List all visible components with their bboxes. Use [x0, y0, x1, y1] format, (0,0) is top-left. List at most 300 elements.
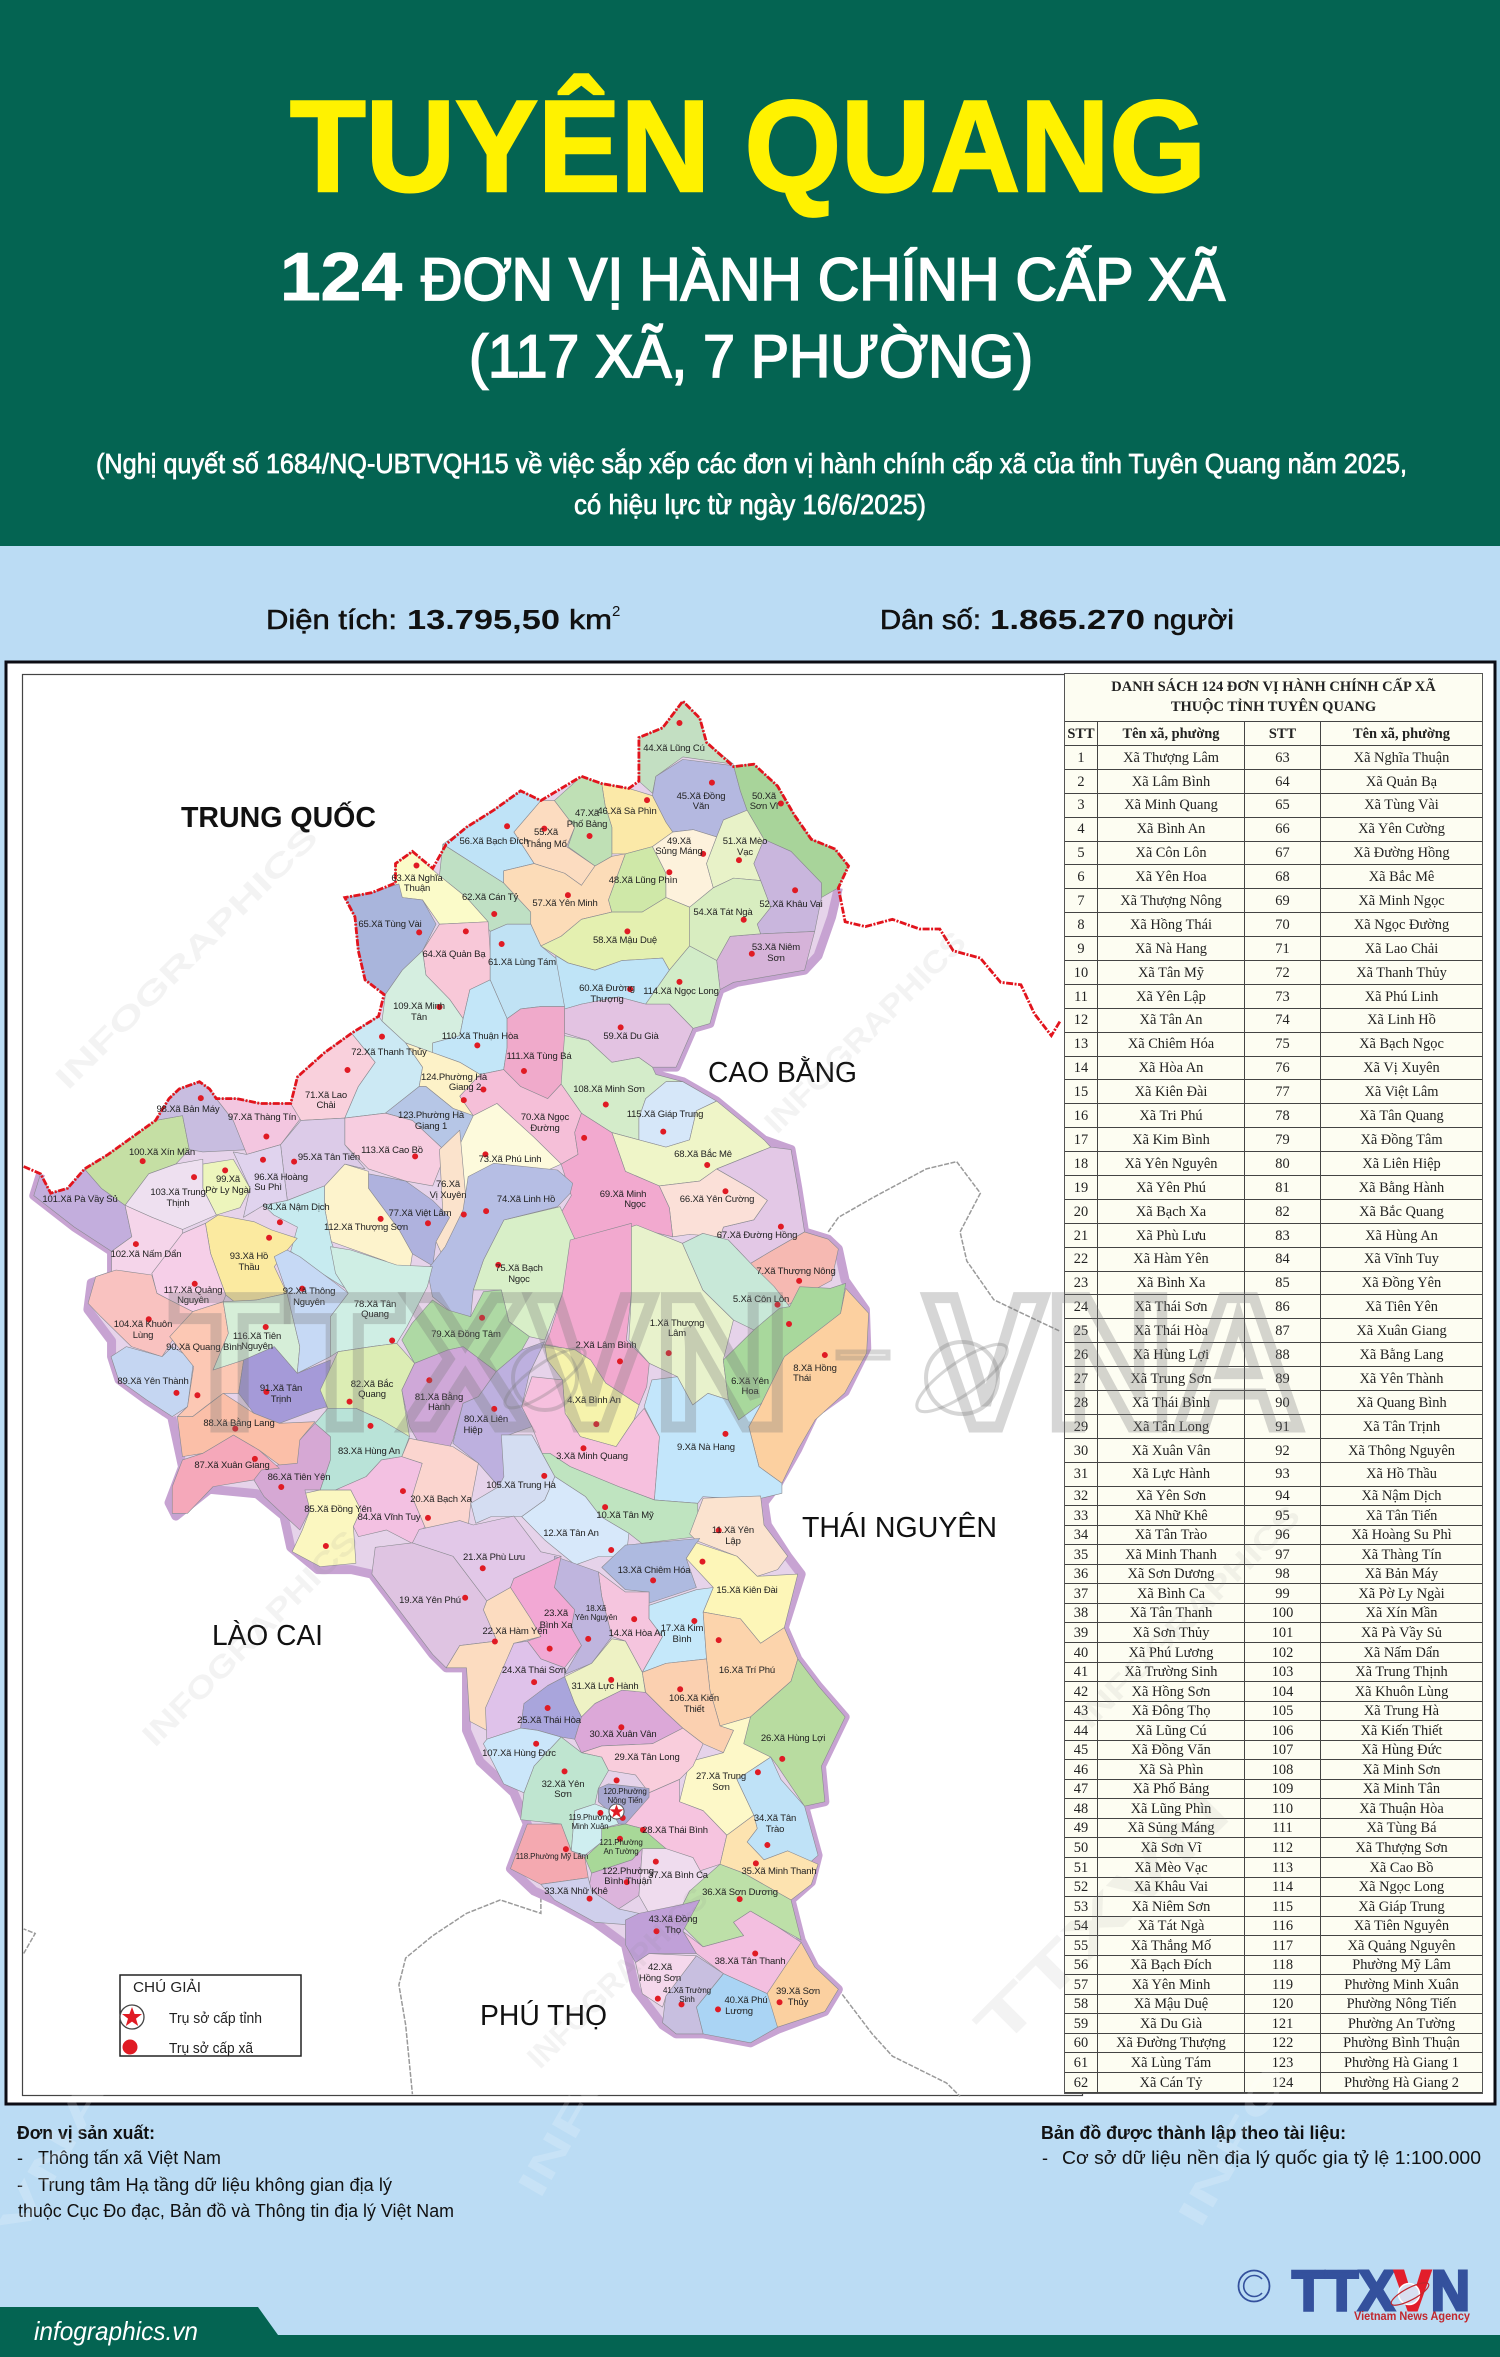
commune name labels: 113.Xã Cao Bồ: [361, 1145, 423, 1156]
table: list of 124 communes: 35: [1074, 1547, 1088, 1563]
table: list of 124 communes: Xã Bạch Ngọc: [1359, 1036, 1444, 1052]
table: list of 124 communes: Xã Đồng Văn: [1131, 1742, 1211, 1758]
table: list of 124 communes: Xã Bạch Đích: [1130, 1957, 1212, 1973]
table: list of 124 communes: 43: [1074, 1703, 1088, 1719]
commune name labels: 28.Xã Thái Bình: [642, 1825, 708, 1836]
table: list of 124 communes: Xã Yên Minh: [1132, 1977, 1210, 1993]
table: list of 124 communes: Xã Trung Hà: [1364, 1703, 1439, 1719]
commune name labels: 24.Xã Thái Sơn: [502, 1665, 566, 1676]
table: list of 124 communes: 52: [1074, 1879, 1088, 1895]
commune name labels: 99.Xã: [216, 1174, 241, 1185]
commune name labels: Minh Xuân: [572, 1822, 608, 1831]
table: list of 124 communes: Xã Yên Sơn: [1136, 1488, 1206, 1504]
faint diagonal watermarks: INFOGRAPHICS: [135, 1523, 365, 1753]
table: list of 124 communes: 74: [1275, 1012, 1290, 1028]
commune name labels: 86.Xã Tiên Yên: [268, 1472, 330, 1483]
neighbour label: Trung Quốc: TRUNG QUỐC: [181, 800, 376, 834]
table: list of 124 communes: 70: [1275, 917, 1290, 933]
table: list of 124 communes: Xã Bình Ca: [1137, 1586, 1205, 1602]
commune name labels: 12.Xã Tân An: [543, 1528, 599, 1539]
table: list of 124 communes: Xã Tiên Yên: [1365, 1299, 1438, 1315]
commune name labels: Bình Thuận: [604, 1876, 652, 1887]
table: list of 124 communes: Xã Thượng Lâm: [1123, 750, 1219, 766]
commune name labels: 112.Xã Thượng Sơn: [324, 1222, 408, 1233]
commune name labels: 35.Xã Minh Thanh: [741, 1866, 817, 1877]
table: list of 124 communes: Xã Cao Bồ: [1370, 1860, 1433, 1876]
commune name labels: 110.Xã Thuận Hòa: [442, 1031, 519, 1042]
table: list of 124 communes: Xã Sơn Dương: [1128, 1566, 1214, 1582]
table: list of 124 communes: Xã Tân Trào: [1135, 1527, 1207, 1543]
table: list of 124 communes: Phường Mỹ Lâm: [1352, 1957, 1451, 1973]
commune name labels: 27.Xã Trung: [696, 1771, 746, 1782]
table: list of 124 communes: Xã Du Già: [1140, 2016, 1202, 2032]
table: list of 124 communes: Xã Hùng An: [1365, 1228, 1438, 1244]
table: list of 124 communes: 65: [1275, 797, 1290, 813]
table: list of 124 communes: Xã Hùng Đức: [1361, 1742, 1442, 1758]
logo: TTXVN: TTXVN: [1292, 2259, 1470, 2323]
table: list of 124 communes: 36: [1074, 1566, 1088, 1582]
commune name labels: 29.Xã Tân Long: [614, 1752, 680, 1763]
commune name labels: 41.Xã Trường: [663, 1986, 711, 1995]
commune name labels: 58.Xã Mậu Duệ: [593, 935, 657, 946]
table: list of 124 communes: 94: [1275, 1488, 1290, 1504]
commune name labels: Lương: [725, 2006, 753, 2017]
table: list of 124 communes: 48: [1074, 1801, 1088, 1817]
table: list of 124 communes: Xã Thàng Tín: [1361, 1547, 1442, 1563]
commune name labels: 46.Xã Sà Phìn: [597, 806, 657, 817]
large watermark: TTXVN - VNA: TTXVN: [172, 1257, 790, 1467]
table: list of 124 communes: Xã Quang Bình: [1356, 1395, 1447, 1411]
table: list of 124 communes: Xã Tân Tiến: [1366, 1508, 1437, 1524]
table: list of 124 communes: 40: [1074, 1644, 1088, 1660]
table: list of 124 communes: Xã Tân An: [1140, 1012, 1202, 1028]
commune name labels: 101.Xã Pà Vầy Sủ: [42, 1194, 118, 1205]
commune name labels: 23.Xã: [544, 1608, 569, 1619]
commune name labels: Bình Xa: [540, 1620, 573, 1631]
commune name labels: 83.Xã Hùng An: [338, 1446, 400, 1457]
table: list of 124 communes: Xã Đường Hồng: [1353, 845, 1450, 861]
commune name labels: Quang: [358, 1389, 386, 1400]
province base fill: [34, 701, 867, 2043]
commune name labels: Thượng: [590, 994, 624, 1005]
commune name labels: 107.Xã Hùng Đức: [482, 1748, 556, 1759]
commune name labels: 114.Xã Ngọc Long: [643, 986, 719, 997]
table: list of 124 communes: Xã Yên Cường: [1358, 821, 1445, 837]
commune name labels: 3.Xã Minh Quang: [556, 1451, 628, 1462]
commune name labels: 100.Xã Xín Mần: [129, 1147, 195, 1158]
table: list of 124 communes: 38: [1074, 1605, 1088, 1621]
table: list of 124 communes: 23: [1074, 1275, 1088, 1291]
table: list of 124 communes: 72: [1275, 965, 1290, 981]
table: list of 124 communes: Xã Minh Tân: [1363, 1781, 1440, 1797]
commune name labels: 84.Xã Vĩnh Tuy: [358, 1512, 421, 1523]
table: list of 124 communes: Xã Xuân Vân: [1132, 1443, 1210, 1459]
commune name labels: Thầu: [238, 1262, 260, 1273]
faint diagonal watermarks: INFOGRAPHICS: [757, 924, 973, 1140]
table: list of 124 communes: 17: [1074, 1132, 1088, 1148]
table: list of 124 communes: 86: [1275, 1299, 1290, 1315]
commune name labels: 102.Xã Nấm Dẩn: [111, 1249, 181, 1260]
table: list of 124 communes: Xã Quảng Nguyên: [1348, 1938, 1455, 1954]
table: list of 124 communes: Xã Tân Long: [1133, 1419, 1209, 1435]
commune name labels: Ngọc: [624, 1199, 646, 1210]
footer diagonal watermarks: INFO: [510, 2044, 628, 2204]
table: list of 124 communes: 85: [1275, 1275, 1290, 1291]
table: list of 124 communes: STT: [1067, 726, 1095, 742]
table: list of 124 communes: Xã Phú Lương: [1129, 1644, 1213, 1660]
table: list of 124 communes: Xã Đường Thượng: [1116, 2035, 1226, 2051]
table: list of 124 communes: Xã Lũng Cú: [1135, 1723, 1207, 1739]
commune name labels: Đường: [530, 1123, 560, 1134]
commune name labels: 39.Xã Sơn: [776, 1986, 820, 1997]
table: list of 124 communes: 29: [1074, 1419, 1088, 1435]
commune name labels: 47.Xã: [575, 808, 600, 819]
commune name labels: 103.Xã Trung: [150, 1187, 206, 1198]
table: list of 124 communes: Xã Thượng Sơn: [1355, 1840, 1448, 1856]
commune name labels: 75.Xã Bạch: [495, 1263, 543, 1274]
resolution note: có hiệu lực từ ngày 16/6/2025): [574, 489, 926, 520]
table: list of 124 communes: Xã Nhữ Khê: [1134, 1508, 1208, 1524]
table: list of 124 communes: 83: [1275, 1228, 1290, 1244]
China frontier red border: [24, 701, 1060, 1193]
table: list of 124 communes: 111: [1272, 1820, 1293, 1836]
table: list of 124 communes: Xã Hàm Yên: [1133, 1251, 1209, 1267]
table: list of 124 communes: 54: [1074, 1918, 1088, 1934]
faint diagonal watermarks: [48, 819, 1307, 2075]
commune name labels: 115.Xã Giáp Trung: [627, 1109, 703, 1120]
table: list of 124 communes: 20: [1074, 1204, 1088, 1220]
table: list of 124 communes: 30: [1074, 1443, 1088, 1459]
commune name labels: Giang 1: [415, 1121, 447, 1132]
table: list of 124 communes: Xã Lực Hành: [1132, 1466, 1210, 1482]
commune name labels: 63.Xã Nghĩa: [391, 873, 443, 884]
table: list of 124 communes: Xã Nấm Dẩn: [1364, 1644, 1439, 1660]
table: list of 124 communes: 45: [1074, 1742, 1088, 1758]
table: list of 124 communes: Xã Vĩnh Tuy: [1364, 1251, 1439, 1267]
commune name labels: 48.Xã Lũng Phìn: [609, 875, 677, 886]
table: list of 124 communes: 46: [1074, 1762, 1088, 1778]
commune name labels: 45.Xã Đồng: [677, 791, 725, 802]
table: list of 124 communes: Xã Lũng Phìn: [1131, 1801, 1211, 1817]
large watermark: TTXVN - VNA: VNA: [926, 1257, 1303, 1467]
table: list of 124 communes: 1: [1077, 750, 1085, 766]
commune name labels: 72.Xã Thanh Thủy: [351, 1047, 427, 1058]
commune name labels: 120.Phường: [603, 1787, 647, 1796]
commune name labels: Thủy: [788, 1997, 809, 2008]
commune name labels: Hiệp: [464, 1425, 482, 1436]
table: list of 124 communes: 107: [1272, 1742, 1293, 1758]
table: list of 124 communes: Xã Phú Linh: [1365, 989, 1438, 1005]
table: list of 124 communes: 112: [1272, 1840, 1293, 1856]
commune name labels: 53.Xã Niêm: [752, 942, 800, 953]
commune name labels: 64.Xã Quản Bạ: [422, 949, 486, 960]
table: list of 124 communes: Xã Minh Ngọc: [1358, 893, 1445, 909]
table: list of 124 communes: 101: [1272, 1625, 1293, 1641]
table: list of 124 communes: Xã Bạch Xa: [1136, 1204, 1206, 1220]
commune name labels: 109.Xã Minh: [393, 1001, 445, 1012]
table: list of 124 communes: Xã Xín Mần: [1366, 1605, 1437, 1621]
commune name labels: 26.Xã Hùng Lợi: [761, 1733, 825, 1744]
header band: [0, 0, 1500, 546]
table: list of 124 communes: 93: [1275, 1466, 1290, 1482]
commune name labels: 87.Xã Xuân Giang: [194, 1460, 270, 1471]
commune name labels: Nguyên: [177, 1295, 209, 1306]
table: list of 124 communes: 99: [1275, 1586, 1290, 1602]
commune name labels: Pờ Ly Ngài: [205, 1185, 251, 1196]
table: list of 124 communes: 115: [1272, 1899, 1293, 1915]
commune name labels: 43.Xã Đồng: [649, 1914, 697, 1925]
commune name labels: 67.Xã Đường Hồng: [717, 1230, 797, 1241]
commune polygons: southern section: [372, 1496, 845, 2043]
footer: map sources: Bản đồ được thành lập theo tài liệu:: [1041, 2123, 1346, 2143]
commune name labels: 76.Xã: [436, 1179, 461, 1190]
commune name labels: 95.Xã Tân Tiến: [298, 1152, 360, 1163]
table: list of 124 communes: Xã Tân Trịnh: [1363, 1419, 1440, 1435]
table: list of 124 communes: 26: [1074, 1347, 1088, 1363]
table: list of 124 communes: 59: [1074, 2016, 1088, 2032]
table: list of 124 communes: 34: [1074, 1527, 1088, 1543]
table: list of 124 communes: Xã Đông Thọ: [1132, 1703, 1210, 1719]
title: TUYÊN QUANG: [290, 73, 1206, 219]
table: list of 124 communes: Xã Trung Thịnh: [1355, 1664, 1448, 1680]
commune name labels: Thái: [793, 1373, 811, 1384]
commune name labels: Trào: [766, 1824, 784, 1835]
table: list of 124 communes: STT: [1269, 726, 1296, 742]
table: list of 124 communes: Xã Tân Thanh: [1130, 1605, 1212, 1621]
table: list of 124 communes: 22: [1074, 1251, 1088, 1267]
commune polygons: northern section: [34, 701, 849, 1307]
commune name labels: 10.Xã Tân Mỹ: [596, 1510, 654, 1521]
table: list of 124 communes: Xã Bằng Hành: [1359, 1180, 1444, 1196]
table: list of 124 communes: Phường Hà Giang 2: [1344, 2075, 1459, 2091]
table: list of 124 communes: 41: [1074, 1664, 1088, 1680]
commune name labels: 50.Xã: [752, 791, 777, 802]
table: list of 124 communes: 95: [1275, 1508, 1290, 1524]
table: list of 124 communes: 62: [1074, 2075, 1088, 2091]
table: list of 124 communes: Xã Minh Sơn: [1363, 1762, 1440, 1778]
table: list of 124 communes: 42: [1074, 1684, 1088, 1700]
faint diagonal watermarks: INFOGRAPHICS: [1070, 1498, 1307, 1735]
commune name labels: Nông Tiến: [607, 1796, 643, 1805]
commune name labels: Sơn: [712, 1782, 730, 1793]
table: list of 124 communes: Xã Hòa An: [1139, 1060, 1203, 1076]
table: list of 124 communes: Xã Minh Thanh: [1125, 1547, 1217, 1563]
stat: area: 2: [612, 603, 620, 620]
table: list of 124 communes: 37: [1074, 1586, 1088, 1602]
table: list of 124 communes: Xã Trường Sinh: [1124, 1664, 1217, 1680]
footer: producers: thuộc Cục Đo đạc, Bản đồ và Thông tin địa lý Việt Nam: [18, 2201, 454, 2221]
table: list of 124 communes: Xã Sơn Thủy: [1133, 1625, 1209, 1641]
table: list of 124 communes: Xã Hoàng Su Phì: [1351, 1527, 1452, 1543]
table: list of 124 communes: 64: [1275, 774, 1290, 790]
table: list of 124 communes: Xã Kiên Đài: [1135, 1084, 1207, 1100]
commune name labels: 116.Xã Tiên: [233, 1331, 281, 1342]
commune name labels: 2.Xã Lâm Bình: [576, 1340, 636, 1351]
table: list of 124 communes: Xã Yên Lập: [1136, 989, 1206, 1005]
commune headquarter dots: [136, 723, 825, 2009]
commune name labels: 79.Xã Đồng Tâm: [431, 1329, 501, 1340]
table: list of 124 communes: Xã Bắc Quang: [1359, 1204, 1444, 1220]
table: list of 124 communes: 4: [1077, 821, 1085, 837]
table: list of 124 communes: 7: [1077, 893, 1085, 909]
table: list of 124 communes: Phường Nông Tiến: [1347, 1996, 1456, 2012]
commune name labels: 49.Xã: [667, 836, 692, 847]
table: list of 124 communes: 110: [1272, 1801, 1293, 1817]
table: list of 124 communes: Xã Tùng Bá: [1366, 1820, 1437, 1836]
commune name labels: 90.Xã Quang Bình: [166, 1342, 242, 1353]
commune name labels: 85.Xã Đồng Yên: [304, 1504, 372, 1515]
table: list of 124 communes: 73: [1275, 989, 1290, 1005]
table: list of 124 communes: 120: [1272, 1996, 1293, 2012]
commune name labels: 68.Xã Bắc Mê: [674, 1149, 732, 1160]
commune name labels: 17.Xã Kim: [661, 1623, 703, 1634]
commune name labels: 108.Xã Minh Sơn: [573, 1084, 645, 1095]
table: list of 124 communes: 18: [1074, 1156, 1088, 1172]
table: list of 124 communes: 119: [1272, 1977, 1293, 1993]
table: list of 124 communes: Xã Giáp Trung: [1358, 1899, 1445, 1915]
commune name labels: 31.Xã Lực Hành: [571, 1681, 639, 1692]
table: list of 124 communes: Xã Lâm Bình: [1132, 774, 1210, 790]
footer: producers: -: [17, 2148, 23, 2168]
table: list of 124 communes: Xã Thuận Hòa: [1359, 1801, 1444, 1817]
table: list of 124 communes: 55: [1074, 1938, 1088, 1954]
commune name labels: 9.Xã Nà Hang: [677, 1442, 735, 1453]
commune name labels: 104.Xã Khuôn: [114, 1319, 172, 1330]
table: list of 124 communes: 77: [1275, 1084, 1290, 1100]
commune name labels: 18.Xã: [586, 1604, 607, 1613]
commune name labels: 77.Xã Việt Lâm: [389, 1208, 452, 1219]
commune name labels: 38.Xã Tân Thanh: [715, 1956, 785, 1967]
commune name labels: An Tường: [603, 1847, 639, 1856]
website label: infographics.vn: [34, 2316, 198, 2346]
table: list of 124 communes: 28: [1074, 1395, 1088, 1411]
commune name labels: 20.Xã Bạch Xa: [410, 1494, 473, 1505]
table: list of 124 communes: 2: [1077, 774, 1085, 790]
table: list of 124 communes: Xã Vị Xuyên: [1363, 1060, 1440, 1076]
table: list of 124 communes: 78: [1275, 1108, 1290, 1124]
table: list of 124 communes: 69: [1275, 893, 1290, 909]
commune name labels: 62.Xã Cán Tỷ: [462, 892, 518, 903]
commune name labels: Quang: [361, 1309, 389, 1320]
table: list of 124 communes: 11: [1074, 989, 1088, 1005]
commune name labels: Sủng Máng: [655, 846, 703, 857]
table: list of 124 communes: Xã Nghĩa Thuận: [1354, 750, 1449, 766]
subtitle line 1: ĐƠN VỊ HÀNH CHÍNH CẤP XÃ: [421, 246, 1225, 313]
commune name labels: Sơn Vĩ: [750, 801, 779, 812]
commune name labels: 30.Xã Xuân Vân: [589, 1729, 657, 1740]
table: list of 124 communes: 9: [1077, 941, 1085, 957]
table: list of 124 communes: 49: [1074, 1820, 1088, 1836]
table: list of 124 communes: 102: [1272, 1644, 1293, 1660]
table: list of 124 communes: Xã Tát Ngà: [1138, 1918, 1204, 1934]
table: list of 124 communes: 89: [1275, 1371, 1290, 1387]
table: list of 124 communes: 13: [1074, 1036, 1088, 1052]
commune name labels: 25.Xã Thái Hòa: [517, 1715, 582, 1726]
commune name labels: 93.Xã Hồ: [230, 1251, 268, 1262]
commune name labels: Lập: [725, 1536, 741, 1547]
table: list of 124 communes: Xã Bản Máy: [1365, 1566, 1438, 1582]
table: list of 124 communes: THUỘC TỈNH TUYÊN QUANG: [1171, 698, 1376, 714]
commune name labels: Nguyên: [293, 1297, 325, 1308]
commune name labels: 65.Xã Tùng Vài: [358, 919, 422, 930]
table: list of 124 communes: 116: [1272, 1918, 1293, 1934]
table: list of 124 communes: 33: [1074, 1508, 1088, 1524]
table: list of 124 communes: Xã Kim Bình: [1132, 1132, 1210, 1148]
table: list of 124 communes: 53: [1074, 1899, 1088, 1915]
table: list of 124 communes: Xã Bình Xa: [1137, 1275, 1205, 1291]
commune name labels: Vị Xuyên: [430, 1190, 466, 1201]
commune name labels: Giang 2: [449, 1082, 481, 1093]
table: list of 124 communes: 44: [1074, 1723, 1088, 1739]
table: list of 124 communes: Xã Tri Phú: [1139, 1108, 1203, 1124]
table: list of 124 communes: Phường Hà Giang 1: [1344, 2055, 1459, 2071]
table: list of 124 communes: 58: [1074, 1996, 1088, 2012]
neighbouring province boundaries: [24, 1162, 1060, 2096]
table: list of 124 communes: Xã Bắc Mê: [1369, 869, 1434, 885]
commune name labels: 54.Xã Tát Ngà: [693, 907, 753, 918]
table: list of 124 communes: Xã Bình An: [1137, 821, 1205, 837]
table: list of 124 communes: Xã Hồ Thầu: [1366, 1466, 1437, 1482]
table: list of 124 communes: Xã Khuôn Lùng: [1355, 1684, 1448, 1700]
table: list of 124 communes: 15: [1074, 1084, 1088, 1100]
commune name labels: 124.Phường Hà: [421, 1072, 488, 1083]
commune name labels: Tân: [411, 1012, 427, 1023]
table: list of 124 communes: 71: [1275, 941, 1290, 957]
map panel frame: [6, 662, 1495, 2104]
commune name labels: 71.Xã Lao: [305, 1090, 347, 1101]
table: list of 124 communes: 97: [1275, 1547, 1290, 1563]
commune name labels: 74.Xã Linh Hồ: [497, 1194, 555, 1205]
neighbour label: Cao Bằng: CAO BẰNG: [708, 1055, 857, 1089]
commune name labels: 98.Xã Bản Máy: [156, 1104, 220, 1115]
commune name labels: 11.Xã Yên: [712, 1525, 754, 1536]
map inner frame: [22, 674, 1082, 2096]
table: list of 124 communes: 61: [1074, 2055, 1088, 2071]
commune name labels: Hồng Sơn: [639, 1973, 681, 1984]
table: list of 124 communes: Xã Kiến Thiết: [1360, 1723, 1443, 1739]
commune name labels: 70.Xã Ngọc: [521, 1112, 569, 1123]
commune name labels: 37.Xã Bình Ca: [648, 1870, 709, 1881]
commune name labels: 91.Xã Tân: [260, 1383, 302, 1394]
table: list of 124 communes: 79: [1275, 1132, 1290, 1148]
table: list of 124 communes: 25: [1074, 1323, 1088, 1339]
table: list of 124 communes: Xã Thượng Nông: [1120, 893, 1222, 909]
table: list of 124 communes: Phường Bình Thuận: [1343, 2035, 1460, 2051]
commune name labels: 73.Xã Phú Linh: [479, 1154, 541, 1165]
table: list of 124 communes: Xã Phố Bảng: [1133, 1781, 1209, 1797]
table: list of 124 communes: Xã Thái Hòa: [1134, 1323, 1208, 1339]
commune name labels: [42, 743, 837, 2017]
subtitle line 2: (117 XÃ, 7 PHƯỜNG): [469, 323, 1033, 390]
table: list of 124 communes: Xã Lao Chải: [1365, 941, 1438, 957]
table: list of 124 communes: 24: [1074, 1299, 1088, 1315]
table: list of 124 communes: Xã Côn Lôn: [1135, 845, 1207, 861]
footer: producers: Trung tâm Hạ tầng dữ liệu không gian địa lý: [38, 2175, 392, 2195]
commune name labels: 96.Xã Hoàng: [254, 1172, 308, 1183]
table: list of 124 communes: 6: [1077, 869, 1085, 885]
map legend: Trụ sở cấp xã: [169, 2040, 254, 2057]
stat: population: người: [1153, 604, 1234, 635]
table: list of 124 communes: Xã Đồng Tâm: [1360, 1132, 1443, 1148]
footer: map sources: [1041, 2123, 1481, 2168]
stat: area: km: [569, 604, 612, 635]
table: list of 124 communes: 57: [1074, 1977, 1088, 1993]
table: list of 124 communes: Tên xã, phường: [1122, 726, 1219, 742]
commune name labels: 44.Xã Lũng Cú: [643, 743, 705, 754]
commune name labels: 89.Xã Yên Thành: [117, 1376, 189, 1387]
table: list of 124 communes: Xã Minh Quang: [1124, 797, 1218, 813]
commune name labels: 57.Xã Yên Minh: [532, 898, 598, 909]
